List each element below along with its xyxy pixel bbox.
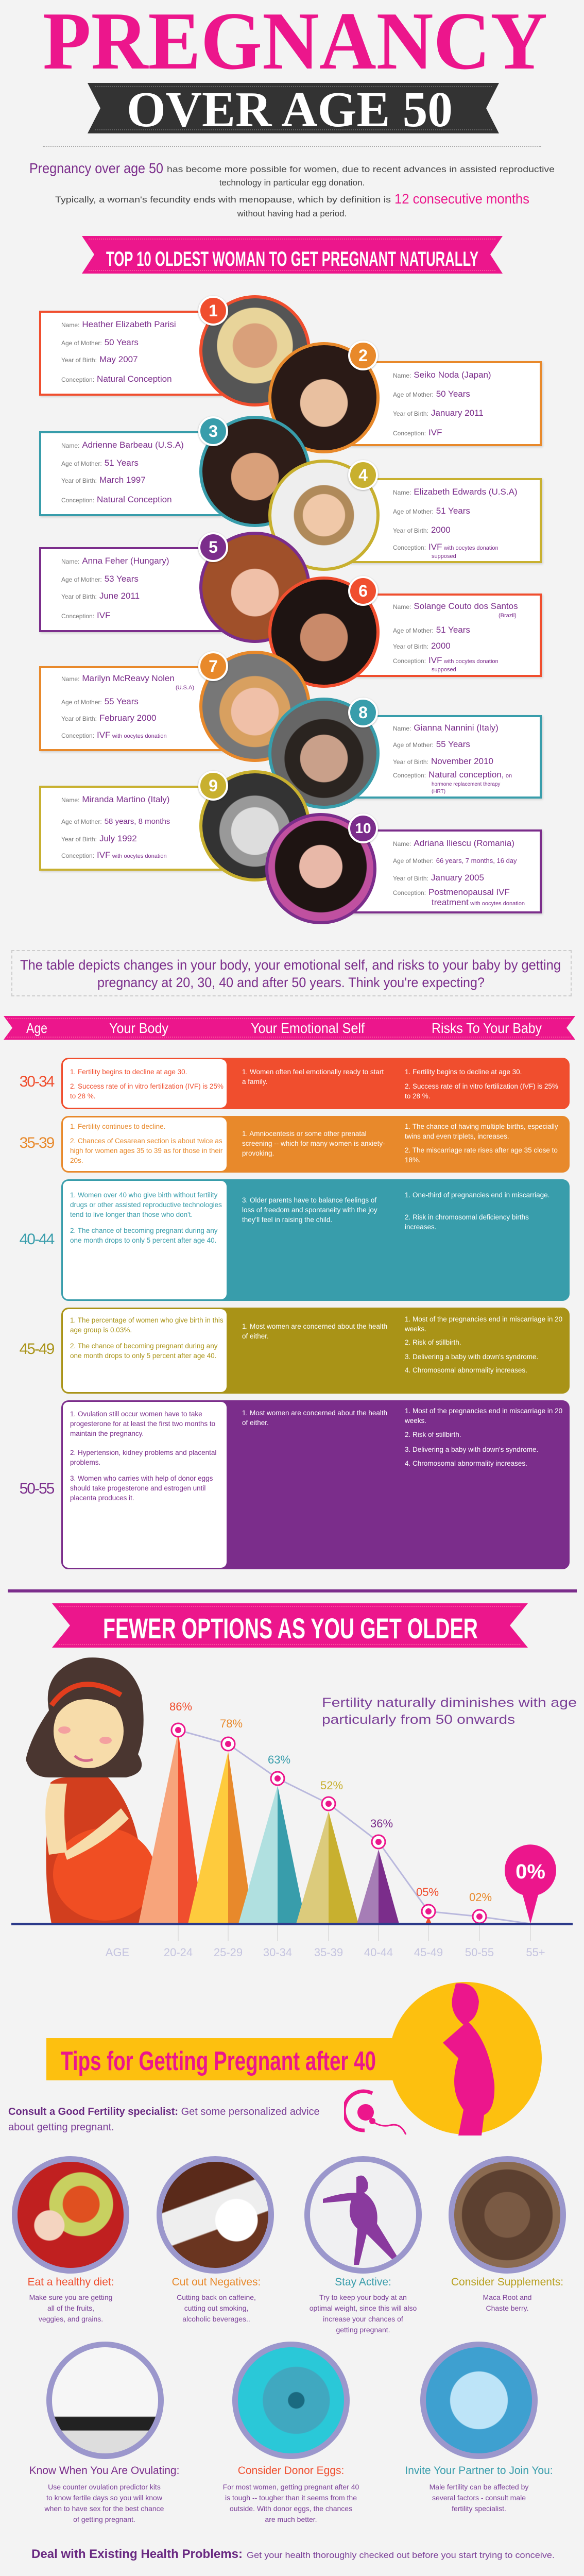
tip: eat healthy: veggies, and grains.	[39, 2315, 103, 2323]
text: deal with health problems: Get your health thoroughly checked out before you start trying to conceive.	[247, 2550, 555, 2560]
table row 45-49: 45-49	[20, 1341, 54, 1358]
tip: partner	[405, 2342, 553, 2513]
card 6: 6	[358, 582, 368, 600]
card 4: supposed	[432, 553, 456, 560]
card 1: Year of Birth: May 2007	[61, 354, 138, 364]
callout: table intro	[11, 950, 572, 996]
tip: donor eggs: are much better.	[265, 2515, 317, 2523]
tip: supplements: Chaste berry.	[486, 2304, 528, 2312]
card 3: Year of Birth: March 1997	[61, 475, 146, 485]
table row 40-44: 1. Women over 40 who give birth without fertility drugs or other assisted reproductive technologies tend to live longer than those who don't.	[70, 1191, 222, 1218]
card 4: 4	[358, 466, 368, 484]
card 5: Name: Anna Feher (Hungary)	[61, 556, 169, 566]
table header ribbon: Your Body	[109, 1020, 168, 1036]
table header ribbon: Your Emotional Self	[251, 1020, 365, 1036]
card 1: Name: Heather Elizabeth Parisi	[61, 319, 176, 329]
text: fertility diminishes	[322, 1696, 577, 1727]
tip: eat healthy: Eat a healthy diet:	[27, 2276, 114, 2288]
table row 45-49: 3. Delivering a baby with down's syndrome.	[405, 1353, 538, 1361]
intro text: technology in particular egg donation.	[219, 178, 365, 188]
card 5: 5	[209, 538, 218, 556]
card 1: Conception: Natural Conception	[61, 374, 172, 384]
tip: partner: several factors - consult male	[432, 2494, 526, 2502]
ribbon: fewer options	[52, 1603, 528, 1648]
card 6: supposed	[432, 667, 456, 673]
table row 50-55: 2. Hypertension, kidney problems and placental problems.	[70, 1449, 216, 1466]
tip: stay active: Try to keep your body at an	[319, 2293, 407, 2301]
chart: fertility by age with pregnant woman: 78%	[220, 1717, 243, 1730]
table row 50-55: 3. Delivering a baby with down's syndrome.	[405, 1446, 538, 1453]
text: deal with health problems: Deal with Existing Health Problems:	[31, 2547, 243, 2561]
card 5: Year of Birth: June 2011	[61, 591, 140, 601]
tip: cut negatives: Cut out Negatives:	[172, 2276, 261, 2288]
card 2	[268, 340, 544, 453]
table row 30-34	[20, 1058, 570, 1109]
card 7: Conception: IVF with oocytes donation	[61, 730, 167, 740]
card 3: Age of Mother: 51 Years	[61, 458, 139, 468]
table row 35-39: 2. Chances of Cesarean section is about twice as high for women ages 35 to 39 as for those in their 20s.	[70, 1137, 222, 1164]
card 8: hormone replacement therapy	[432, 782, 500, 787]
card 9	[39, 770, 310, 882]
card 5: Conception: IVF	[61, 611, 110, 620]
table row 35-39: 35-39	[20, 1134, 54, 1151]
table row 35-39	[20, 1116, 570, 1173]
table row 30-34: 1. Women often feel emotionally ready to start a family.	[242, 1068, 384, 1086]
card 10	[265, 813, 544, 924]
card 1: Age of Mother: 50 Years	[61, 337, 139, 347]
card 3	[39, 416, 310, 527]
table header ribbon	[4, 1016, 575, 1040]
card 6: Name: Solange Couto dos Santos	[393, 601, 518, 611]
table row 45-49: 1. The percentage of women who give birth in this age group is 0.03%.	[70, 1316, 224, 1334]
card 9: Conception: IVF with oocytes donation	[61, 850, 167, 860]
tip: ovulating: to know fertile days so you will know	[46, 2494, 162, 2502]
intro text: Pregnancy over age 50	[29, 160, 163, 176]
table row 35-39: 2. The miscarriage rate rises after age 35 close to 18%.	[405, 1146, 558, 1164]
tip: ovulating: Use counter ovulation predictor kits	[48, 2483, 161, 2491]
card 9: Age of Mother: 58 years, 8 months	[61, 817, 170, 826]
intro text: without having had a period.	[237, 209, 347, 218]
table row 35-39: 1. Amniocentesis or some other prenatal screening -- which for many women is anxiety-provoking.	[242, 1130, 385, 1157]
table row 45-49: 1. Most women are concerned about the health of either.	[242, 1323, 387, 1340]
card 2: Year of Birth: January 2011	[393, 408, 484, 418]
tip: eat healthy: Make sure you are getting	[29, 2293, 112, 2301]
card 8	[268, 697, 544, 809]
card 10: Conception: Postmenopausal IVF	[393, 887, 510, 897]
pin 0%	[505, 1844, 556, 1924]
intro text	[29, 160, 555, 218]
card 5	[39, 532, 310, 643]
card 8: Name: Gianna Nannini (Italy)	[393, 723, 499, 733]
tip: donor eggs: outside. With donor eggs, the chances	[230, 2504, 352, 2513]
card 6: Age of Mother: 51 Years	[393, 625, 470, 635]
table row 30-34: 30-34	[20, 1073, 54, 1090]
card 6: Year of Birth: 2000	[393, 641, 451, 651]
table row 40-44: 2. The chance of becoming pregnant during any one month drops to only 5 percent after age 40.	[70, 1227, 217, 1244]
table row 40-44: 2. Risk in chromosomal deficiency births increases.	[405, 1213, 529, 1231]
tip: ovulating	[29, 2342, 179, 2523]
table row 35-39: 1. The chance of having multiple births, especially twins and even triplets, increases.	[405, 1123, 558, 1140]
tip: stay active: optimal weight, since this will also	[310, 2304, 417, 2312]
text: deal with health problems	[31, 2547, 555, 2561]
card 7: (U.S.A)	[176, 685, 194, 691]
table row 30-34: 2. Success rate of in vitro fertilization (IVF) is 25% to 28 %.	[405, 1082, 558, 1100]
card 7: Name: Marilyn McReavy Nolen	[61, 673, 175, 683]
intro text: has become more possible for women, due to recent advances in assisted reproductive	[167, 164, 555, 174]
tip: stay active: getting pregnant.	[336, 2326, 390, 2334]
chart: fertility by age with pregnant woman: 86%	[169, 1700, 192, 1713]
card 2: Age of Mother: 50 Years	[393, 389, 470, 399]
table row 40-44: 3. Older parents have to balance feelings of loss of freedom and spontaneity with the joy they'll feel in raising the child.	[242, 1196, 377, 1224]
text: consult specialist: Consult a Good Fertility specialist: Get some personalized advice about getting pregnant.	[8, 2106, 320, 2133]
card 5: Age of Mother: 53 Years	[61, 574, 139, 584]
table row 30-34: 1. Fertility begins to decline at age 30.	[405, 1068, 522, 1076]
card 3: Name: Adrienne Barbeau (U.S.A)	[61, 440, 184, 450]
table row 50-55: 3. Women who carries with help of donor eggs should take progesterone and estrogen until placenta produces it.	[70, 1475, 213, 1502]
card 7: Age of Mother: 55 Years	[61, 697, 139, 706]
subtitle ribbon: over age 50: OVER AGE 50	[127, 82, 453, 138]
table header ribbon: Age	[26, 1020, 47, 1036]
card 2: Conception: IVF	[393, 428, 442, 437]
table row 45-49: 4. Chromosomal abnormality increases.	[405, 1366, 527, 1374]
tip: partner: fertility specialist.	[452, 2504, 506, 2513]
chart: fertility by age with pregnant woman: 36%	[370, 1817, 393, 1830]
tip: donor eggs: is tough -- tougher than it seems from the	[225, 2494, 357, 2502]
chart: fertility by age with pregnant woman: 63%	[268, 1753, 290, 1766]
card 10: treatment with oocytes donation	[432, 897, 525, 907]
card 2: Name: Seiko Noda (Japan)	[393, 370, 491, 380]
card 2: 2	[358, 346, 368, 365]
heading bar: tips	[46, 2038, 394, 2080]
table row 40-44: 1. One-third of pregnancies end in miscarriage.	[405, 1191, 549, 1199]
table row 50-55: 1. Most of the pregnancies end in miscarriage in 20 weeks.	[405, 1407, 562, 1425]
table row 35-39: 1. Fertility continues to decline.	[70, 1123, 165, 1130]
tip: donor eggs	[223, 2342, 359, 2523]
tip: ovulating: when to have sex for the best chance	[45, 2504, 164, 2513]
card 7: Year of Birth: February 2000	[61, 713, 157, 723]
card 8: Year of Birth: November 2010	[393, 756, 493, 766]
tip: stay active	[304, 2156, 422, 2334]
illustration: pregnant woman	[26, 1657, 156, 1924]
table row 50-55: 1. Most women are concerned about the health of either.	[242, 1409, 387, 1427]
card 4: Age of Mother: 51 Years	[393, 506, 470, 516]
card 1: 1	[209, 301, 218, 320]
card 4: Conception: IVF with oocytes donation	[393, 542, 499, 552]
table row 50-55	[20, 1400, 570, 1569]
callout: table intro: pregnancy at 20, 30, 40 and after 50 years. Think you're expecting?	[97, 975, 485, 990]
tip: donor eggs: For most women, getting pregnant after 40	[223, 2483, 359, 2491]
text: fertility diminishes: particularly from 50 onwards	[322, 1713, 515, 1727]
tip: stay active: increase your chances of	[323, 2315, 403, 2323]
tip: donor eggs: Consider Donor Eggs:	[238, 2465, 344, 2477]
card 10: Age of Mother: 66 years, 7 months, 16 day	[393, 857, 517, 865]
card 8: 8	[358, 703, 368, 722]
card 8: Age of Mother: 55 Years	[393, 739, 470, 749]
intro text: Typically, a woman's fecundity ends with menopause, which by definition is	[55, 195, 391, 205]
tip: eat healthy: all of the fruits,	[47, 2304, 94, 2312]
table row 30-34: 2. Success rate of in vitro fertilization (IVF) is 25% to 28 %.	[70, 1082, 224, 1100]
card 10: Name: Adriana Iliescu (Romania)	[393, 838, 514, 848]
table row 45-49	[20, 1308, 570, 1394]
tip: cut negatives: alcoholic beverages..	[182, 2315, 250, 2323]
table row 45-49: 1. Most of the pregnancies end in miscarriage in 20 weeks.	[405, 1315, 562, 1333]
card 10: Year of Birth: January 2005	[393, 873, 484, 883]
card 9: 9	[209, 776, 218, 795]
text: fertility diminishes: Fertility naturally diminishes with age	[322, 1696, 577, 1710]
ribbon: top 10 oldest	[82, 236, 503, 274]
card 6	[268, 575, 544, 688]
chart: fertility by age with pregnant woman: 0%	[516, 1860, 545, 1883]
card 8: Conception: Natural conception, on	[393, 770, 512, 779]
card 3: Conception: Natural Conception	[61, 495, 172, 504]
tip: supplements: Maca Root and	[483, 2293, 531, 2301]
card 6: (Brazil)	[499, 613, 517, 619]
chart: fertility by age with pregnant woman: 02%	[469, 1891, 492, 1904]
table row 40-44: 40-44	[20, 1231, 54, 1248]
table row 50-55: 2. Risk of stillbirth.	[405, 1431, 461, 1438]
card 9: Name: Miranda Martino (Italy)	[61, 794, 169, 804]
tip: cut negatives: cutting out smoking,	[184, 2304, 248, 2312]
tip: cut negatives: Cutting back on caffeine,	[177, 2293, 256, 2301]
chart: fertility by age with pregnant woman	[11, 1657, 573, 1958]
table row 50-55: 50-55	[20, 1480, 54, 1497]
card 8: (HRT)	[432, 789, 445, 794]
tip: partner: Invite Your Partner to Join You:	[405, 2465, 553, 2477]
table row 45-49: 2. Risk of stillbirth.	[405, 1338, 461, 1346]
card 7: 7	[209, 657, 218, 675]
card 3: 3	[209, 422, 218, 440]
card 6: Conception: IVF with oocytes donation	[393, 655, 499, 665]
tip: supplements: Consider Supplements:	[451, 2276, 563, 2288]
card 7	[39, 651, 310, 762]
table header ribbon: Risks To Your Baby	[432, 1020, 542, 1036]
table row 45-49: 2. The chance of becoming pregnant during any one month drops to only 5 percent after age 40.	[70, 1342, 217, 1360]
card 9: Year of Birth: July 1992	[61, 834, 137, 843]
tip: ovulating: Know When You Are Ovulating:	[29, 2465, 179, 2477]
chart: fertility by age with pregnant woman: 52%	[320, 1779, 343, 1792]
chart: fertility by age with pregnant woman: 05%	[416, 1886, 439, 1899]
tip: supplements	[449, 2156, 566, 2312]
card 10: 10	[355, 820, 371, 836]
icon: egg and sperm	[344, 2090, 407, 2135]
card 4	[268, 460, 544, 571]
table row 50-55: 1. Ovulation still occur women have to take progesterone for at least the first two months to maintain the pregnancy.	[70, 1410, 215, 1437]
card 4: Year of Birth: 2000	[393, 525, 451, 535]
card 1	[39, 295, 310, 406]
triangles	[139, 1731, 178, 1924]
intro text: 12 consecutive months	[394, 191, 529, 207]
tip: stay active: Stay Active:	[335, 2276, 391, 2288]
icon: yellow circle with pregnant silhouette	[392, 1982, 542, 2136]
card 4: Name: Elizabeth Edwards (U.S.A)	[393, 487, 518, 497]
table row 50-55: 4. Chromosomal abnormality increases.	[405, 1460, 527, 1467]
table row 30-34: 1. Fertility begins to decline at age 30.	[70, 1068, 187, 1076]
table row 40-44	[20, 1179, 570, 1301]
tip: eat healthy	[12, 2156, 129, 2323]
tip: ovulating: of getting pregnant.	[73, 2515, 135, 2523]
tip: partner: Male fertility can be affected by	[430, 2483, 528, 2491]
tip: cut negatives	[157, 2156, 274, 2323]
